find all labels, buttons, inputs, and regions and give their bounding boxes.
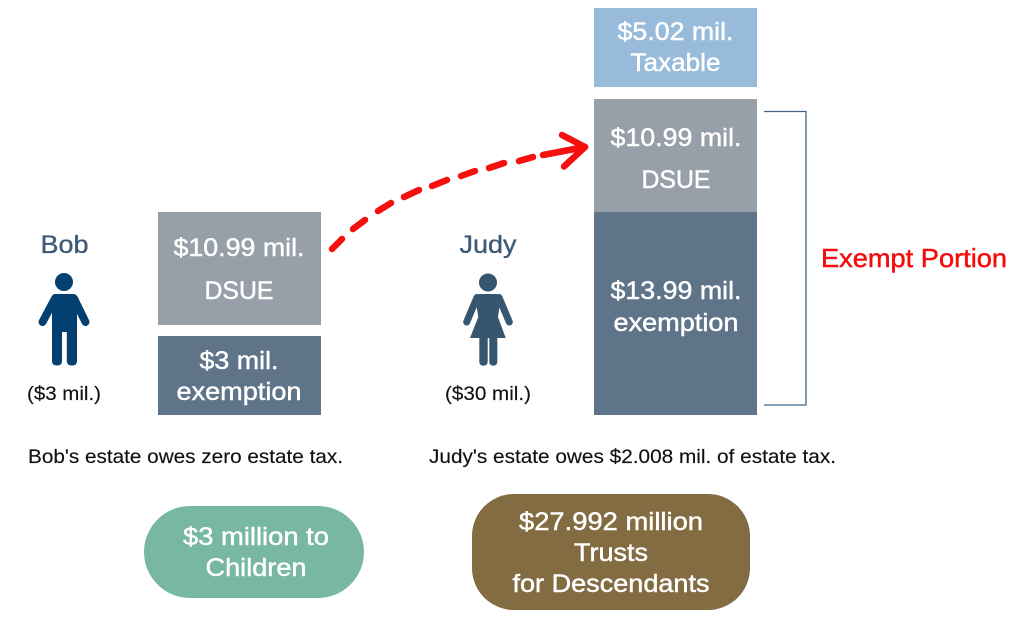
text: Judy's estate outcome: Judy's estate owes $2.008 mil. of estate tax. [429,446,836,468]
panel: Bob DSUE: DSUE [204,277,274,305]
callout: trusts for descendants: for Descendants [512,570,710,598]
panel: Bob DSUE [158,212,321,325]
arrow: DSUE transfer [332,135,585,249]
label: Bob amount: ($3 mil.) [27,383,101,405]
panel: Bob DSUE: $10.99 mil. [174,234,304,262]
callout: children: $3 million to [183,523,329,551]
bracket: exempt portion [764,112,806,405]
panel: Judy exemption [594,212,757,415]
callout: children [144,506,364,598]
panel: Judy DSUE: DSUE [642,166,710,194]
panel: Judy DSUE [594,99,757,212]
icon: male figure [42,273,86,366]
panel: Bob exemption: exemption [176,378,302,406]
panel: Judy taxable [594,8,757,87]
panel: Judy exemption: $13.99 mil. [610,277,742,305]
panel: Judy taxable: $5.02 mil. [618,18,734,46]
callout: children: Children [206,554,306,582]
heading: Bob: Bob [40,231,88,259]
label: Judy amount: ($30 mil.) [445,383,531,405]
callout: trusts for descendants: $27.992 million [519,508,703,536]
panel: Judy exemption: exemption [614,309,738,337]
text: Bob's estate outcome: Bob's estate owes zero estate tax. [28,446,343,468]
callout: trusts for descendants: Trusts [574,539,648,567]
heading: Judy: Judy [460,231,517,259]
panel: Bob exemption: $3 mil. [200,347,278,375]
label: Exempt Portion: Exempt Portion [821,243,1007,273]
panel: Bob exemption [158,336,321,415]
icon: female figure [467,274,509,366]
panel: Judy DSUE: $10.99 mil. [610,124,742,152]
callout: trusts for descendants [472,494,750,610]
panel: Judy taxable: Taxable [630,49,720,77]
